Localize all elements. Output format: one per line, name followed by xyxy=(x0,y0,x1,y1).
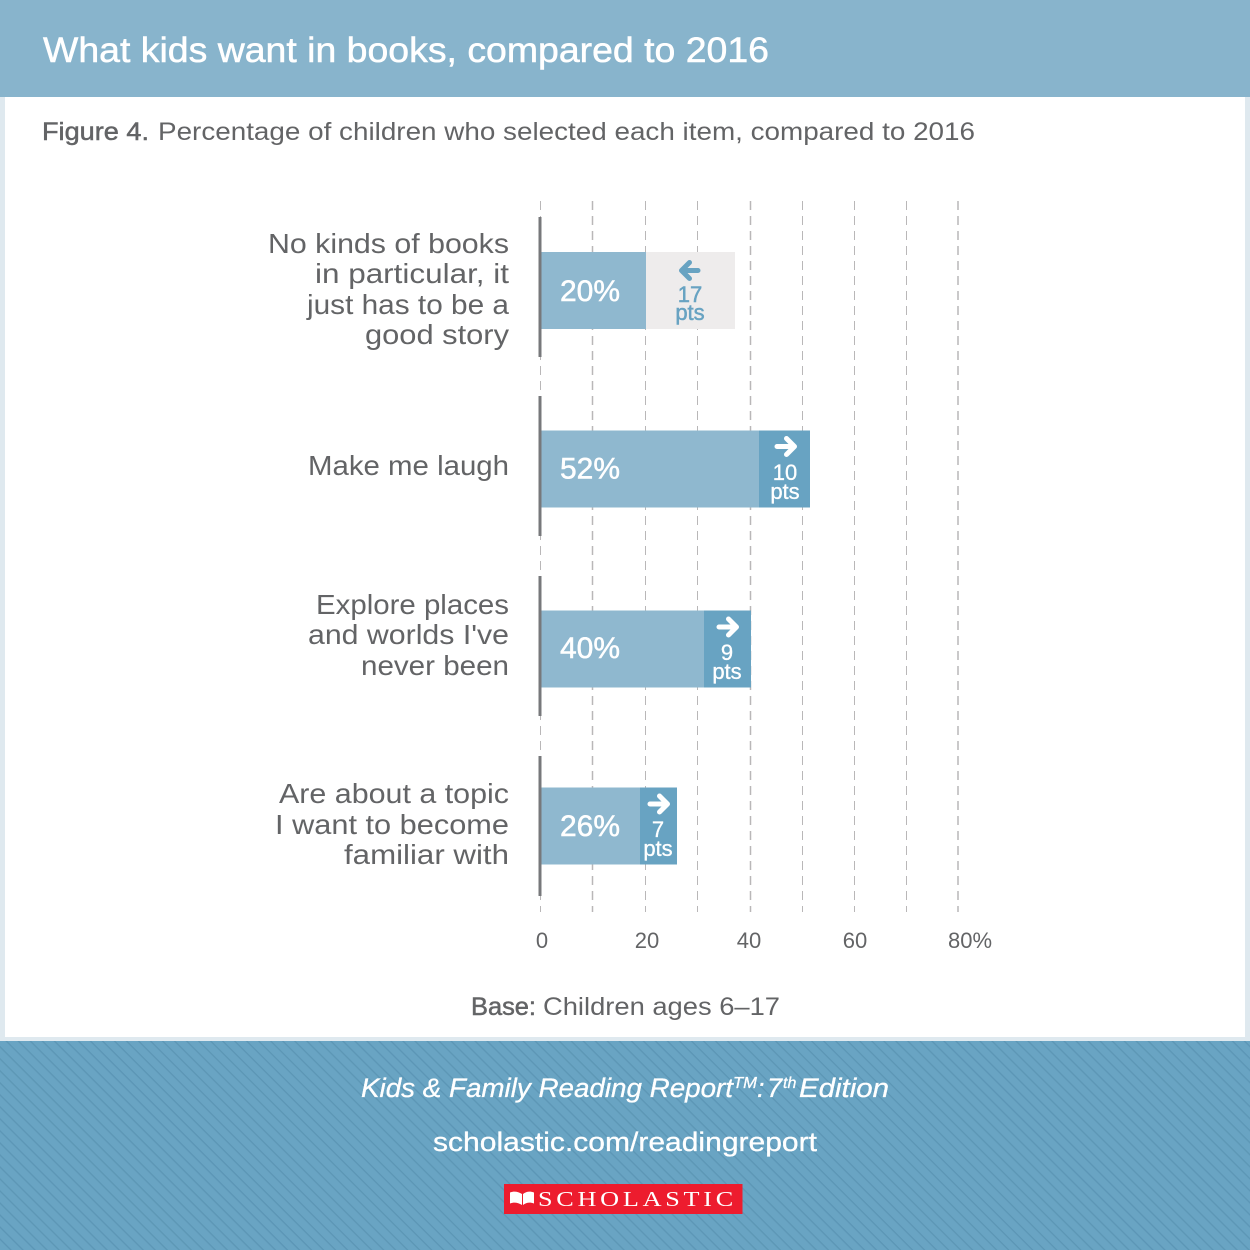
icon: open book xyxy=(510,1192,534,1205)
footer report title xyxy=(361,1073,889,1103)
white content panel xyxy=(5,97,1245,1037)
row 3 value: 40% xyxy=(560,632,620,665)
x axis labels: 80% xyxy=(948,928,992,953)
title banner xyxy=(0,0,1250,97)
footer report title: th xyxy=(783,1075,796,1092)
row 4 change text: pts xyxy=(643,836,673,861)
row 4 value: 26% xyxy=(560,810,620,843)
row 1 label: in particular, it xyxy=(315,258,509,289)
x axis labels: 60 xyxy=(843,928,867,953)
row 4 axis xyxy=(538,756,542,896)
x axis labels xyxy=(536,928,992,953)
row 4 label: Are about a topic xyxy=(279,778,509,809)
row 1 change segment xyxy=(646,252,735,329)
x axis labels: 20 xyxy=(635,928,659,953)
figure caption: Figure 4. xyxy=(42,118,149,146)
row 3 label: and worlds I've xyxy=(308,619,509,650)
row 4 label xyxy=(275,778,509,870)
row 4: about a topic xyxy=(275,756,677,896)
footer report title: : xyxy=(757,1073,765,1103)
x axis labels: 40 xyxy=(737,928,761,953)
row 3 change segment xyxy=(704,610,751,688)
icon: right arrow xyxy=(650,796,668,812)
row 3 change text: 9 xyxy=(721,640,733,665)
row 3 change text: pts xyxy=(712,659,742,684)
row 3 label xyxy=(308,589,509,681)
row 2 value: 52% xyxy=(560,452,620,486)
base note: Base: xyxy=(471,993,536,1021)
icon: right arrow xyxy=(719,619,736,635)
row 2 bar xyxy=(540,430,759,508)
base note: Children ages 6–17 xyxy=(543,993,780,1021)
row 2 label: Make me laugh xyxy=(308,450,509,481)
row 1 label: good story xyxy=(365,319,509,350)
footer report title: Edition xyxy=(799,1073,889,1103)
row 1 change text: 17 xyxy=(678,282,702,307)
footer report title: TM xyxy=(733,1075,758,1092)
row 4 label: I want to become xyxy=(275,809,509,840)
figure caption: Percentage of children who selected each item, compared to 2016 xyxy=(158,118,975,146)
footer band xyxy=(0,1037,1250,1250)
row 1 axis xyxy=(538,217,542,357)
row 3: explore places xyxy=(308,576,751,716)
x axis labels: 0 xyxy=(536,928,548,953)
row 1 label xyxy=(268,228,509,350)
footer report title: Kids & Family Reading Report xyxy=(361,1073,735,1103)
row 1 label: No kinds of books xyxy=(268,228,509,259)
scholastic logo xyxy=(504,1184,742,1214)
footer url: scholastic.com/readingreport xyxy=(433,1127,818,1157)
row 1 label: just has to be a xyxy=(306,289,509,320)
row 4 bar xyxy=(540,788,640,864)
row 4 change segment xyxy=(640,788,677,864)
row 3 label: never been xyxy=(361,650,509,681)
row 2: make me laugh xyxy=(308,396,810,536)
icon: right arrow xyxy=(777,438,794,454)
row 1 value: 20% xyxy=(560,275,620,308)
row 3 axis xyxy=(538,576,542,716)
row 1 bar xyxy=(540,252,646,329)
chart gridlines xyxy=(540,201,958,912)
logo wordmark: SCHOLASTIC xyxy=(538,1187,737,1211)
row 1 change text: pts xyxy=(675,300,705,325)
row 1: no kinds of books xyxy=(268,217,735,357)
title banner: What kids want in books, compared to 2016 xyxy=(43,31,769,70)
row 2 change text: 10 xyxy=(773,460,797,485)
row 4 label: familiar with xyxy=(344,839,509,870)
row 2 change segment xyxy=(759,430,810,508)
row 4 change text: 7 xyxy=(652,817,664,842)
row 2 axis xyxy=(538,396,542,536)
footer report title: 7 xyxy=(767,1073,783,1103)
icon: left arrow xyxy=(682,262,698,278)
row 3 label: Explore places xyxy=(316,589,509,620)
row 2 change text: pts xyxy=(770,479,800,504)
row 3 bar xyxy=(540,610,704,688)
